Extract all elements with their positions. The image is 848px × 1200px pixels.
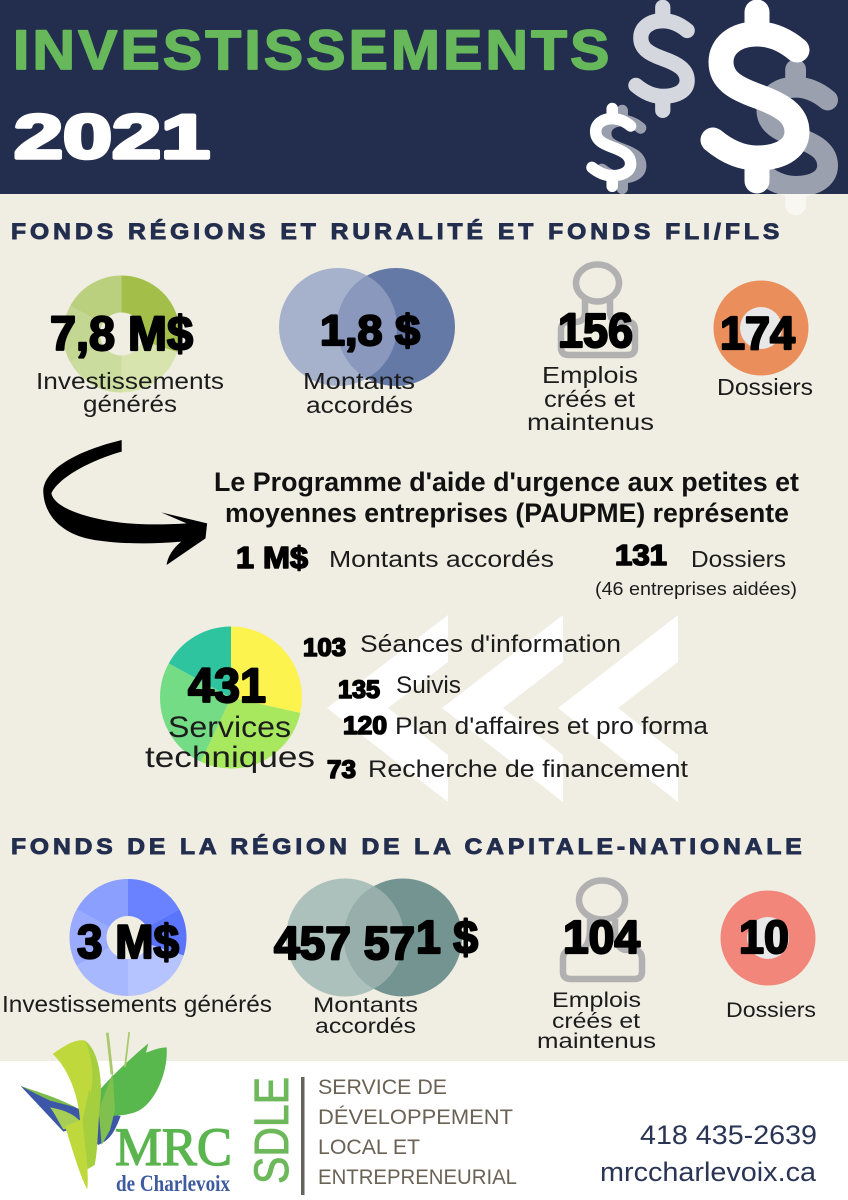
text: service name: SERVICE DE (318, 1076, 447, 1099)
label: Dossiers (726, 999, 816, 1022)
label: Emplois (542, 362, 638, 388)
panel: services techniques (145, 660, 315, 774)
value: 174 (720, 307, 795, 359)
panel: PAUPME figures (236, 540, 797, 599)
panel: emplois 104 (537, 880, 656, 1053)
label: Montants (303, 368, 415, 394)
label: créés et (552, 1010, 640, 1033)
value: 104 (563, 911, 640, 963)
decoration: white chevrons (327, 615, 678, 802)
text: contact: 418 435-2639 (640, 1120, 817, 1150)
panel: montants accordés 1,8 $ (279, 268, 455, 418)
chart: blue donut (88, 898, 168, 978)
divider (301, 1077, 304, 1195)
title: Investissements: INVESTISSEMENTS (13, 19, 609, 82)
label: services techniques: Services (168, 711, 291, 744)
text: contact: mrccharlevoix.ca (600, 1157, 817, 1187)
footer band (0, 1061, 848, 1200)
header band (0, 0, 848, 194)
value: 3 M$ (77, 915, 179, 968)
value: 1 $ (416, 911, 478, 963)
arrow: curved black (43, 440, 207, 565)
label: créés et (544, 386, 636, 412)
row: recherche: 73 (327, 756, 356, 784)
value: 7,8 M$ (50, 308, 193, 361)
heading: PAUPME: Le Programme d'aide d'urgence aux petites et (214, 467, 799, 497)
panel: montants accordés 457 571 $ (274, 878, 478, 1038)
chart: green donut (82, 294, 162, 374)
value: 457 57 (274, 917, 415, 969)
label: Investissements (36, 368, 224, 394)
row: plan d'affaires: Plan d'affaires et pro forma (395, 713, 709, 740)
label: Montants (313, 994, 418, 1017)
value: 131: 131 (615, 540, 667, 572)
label: maintenus (527, 409, 654, 435)
label: services techniques: techniques (145, 741, 315, 774)
label: Investissements générés (2, 991, 272, 1017)
panel: investissements générés 7,8 M$ (36, 294, 224, 417)
panel: emplois 156 (527, 264, 654, 435)
label: dossiers: Dossiers (691, 546, 786, 572)
label: générés (83, 391, 177, 417)
panel: investissements générés 3 M$ (2, 898, 272, 1017)
label: Dossiers (717, 374, 813, 400)
list: service breakdown (303, 631, 709, 784)
text: service name: LOCAL ET (318, 1136, 420, 1159)
chart: teal venn circles (286, 878, 462, 996)
value: 156 (558, 305, 633, 358)
row: séances: Séances d'information (360, 631, 621, 658)
heading: Fonds de la région: FONDS DE LA RÉGION DE LA CAPITALE-NATIONALE (11, 833, 802, 859)
row: recherche: Recherche de financement (368, 756, 688, 783)
label: accordés (306, 392, 413, 418)
icon: small dollar shadow (602, 111, 641, 188)
row: séances (303, 631, 621, 662)
label: entreprises aidées: (46 entreprises aidées) (595, 579, 797, 599)
text: de Charlevoix: de Charlevoix (116, 1171, 230, 1196)
chart: orange ring (714, 280, 808, 376)
title: year 2021: 2021 (14, 103, 210, 172)
icon: upper grey dollar (636, 7, 687, 110)
heading: PAUPME: moyennes entreprises (PAUPME) représente (225, 498, 789, 528)
logo: MRC de Charlevoix (21, 1032, 232, 1196)
row: séances: 103 (303, 634, 346, 662)
label: accordés (315, 1015, 416, 1038)
heading: Fonds Régions et Ruralité: FONDS RÉGIONS ET RURALITÉ ET FONDS FLI/FLS (11, 218, 779, 244)
value: 431: 431 (188, 660, 266, 713)
row: suivis (338, 672, 461, 704)
value: 1,8 $ (320, 307, 420, 355)
text: SDLE vertical: SDLE (246, 1077, 299, 1184)
row: suivis: Suivis (396, 672, 461, 699)
panel: dossiers 174 (714, 280, 813, 400)
icon: small white dollar (592, 109, 631, 186)
icon: large white dollar (713, 12, 797, 181)
chart: blue venn circles (279, 268, 455, 386)
chart: salmon ring (720, 890, 816, 986)
text: MRC: MRC (115, 1117, 232, 1177)
label: maintenus (537, 1030, 656, 1053)
text: service name: ENTREPRENEURIAL (318, 1166, 517, 1189)
value: 10 (739, 911, 789, 963)
icons: dollar signs (592, 7, 828, 205)
value: 1 M$: 1 M$ (236, 540, 308, 575)
label: montants accordés: Montants accordés (329, 546, 554, 572)
icon: person outline (563, 880, 642, 979)
icon: large translucent dollar (760, 70, 828, 205)
row: suivis: 135 (338, 676, 380, 704)
text: service name: DÉVELOPPEMENT (318, 1106, 513, 1129)
icon: person outline (561, 264, 635, 355)
panel: dossiers 10 (720, 890, 816, 1022)
row: plan d'affaires: 120 (343, 712, 387, 740)
label: Emplois (552, 989, 641, 1012)
chart: pie (196, 662, 266, 733)
icon: logo leaves (21, 1032, 167, 1189)
